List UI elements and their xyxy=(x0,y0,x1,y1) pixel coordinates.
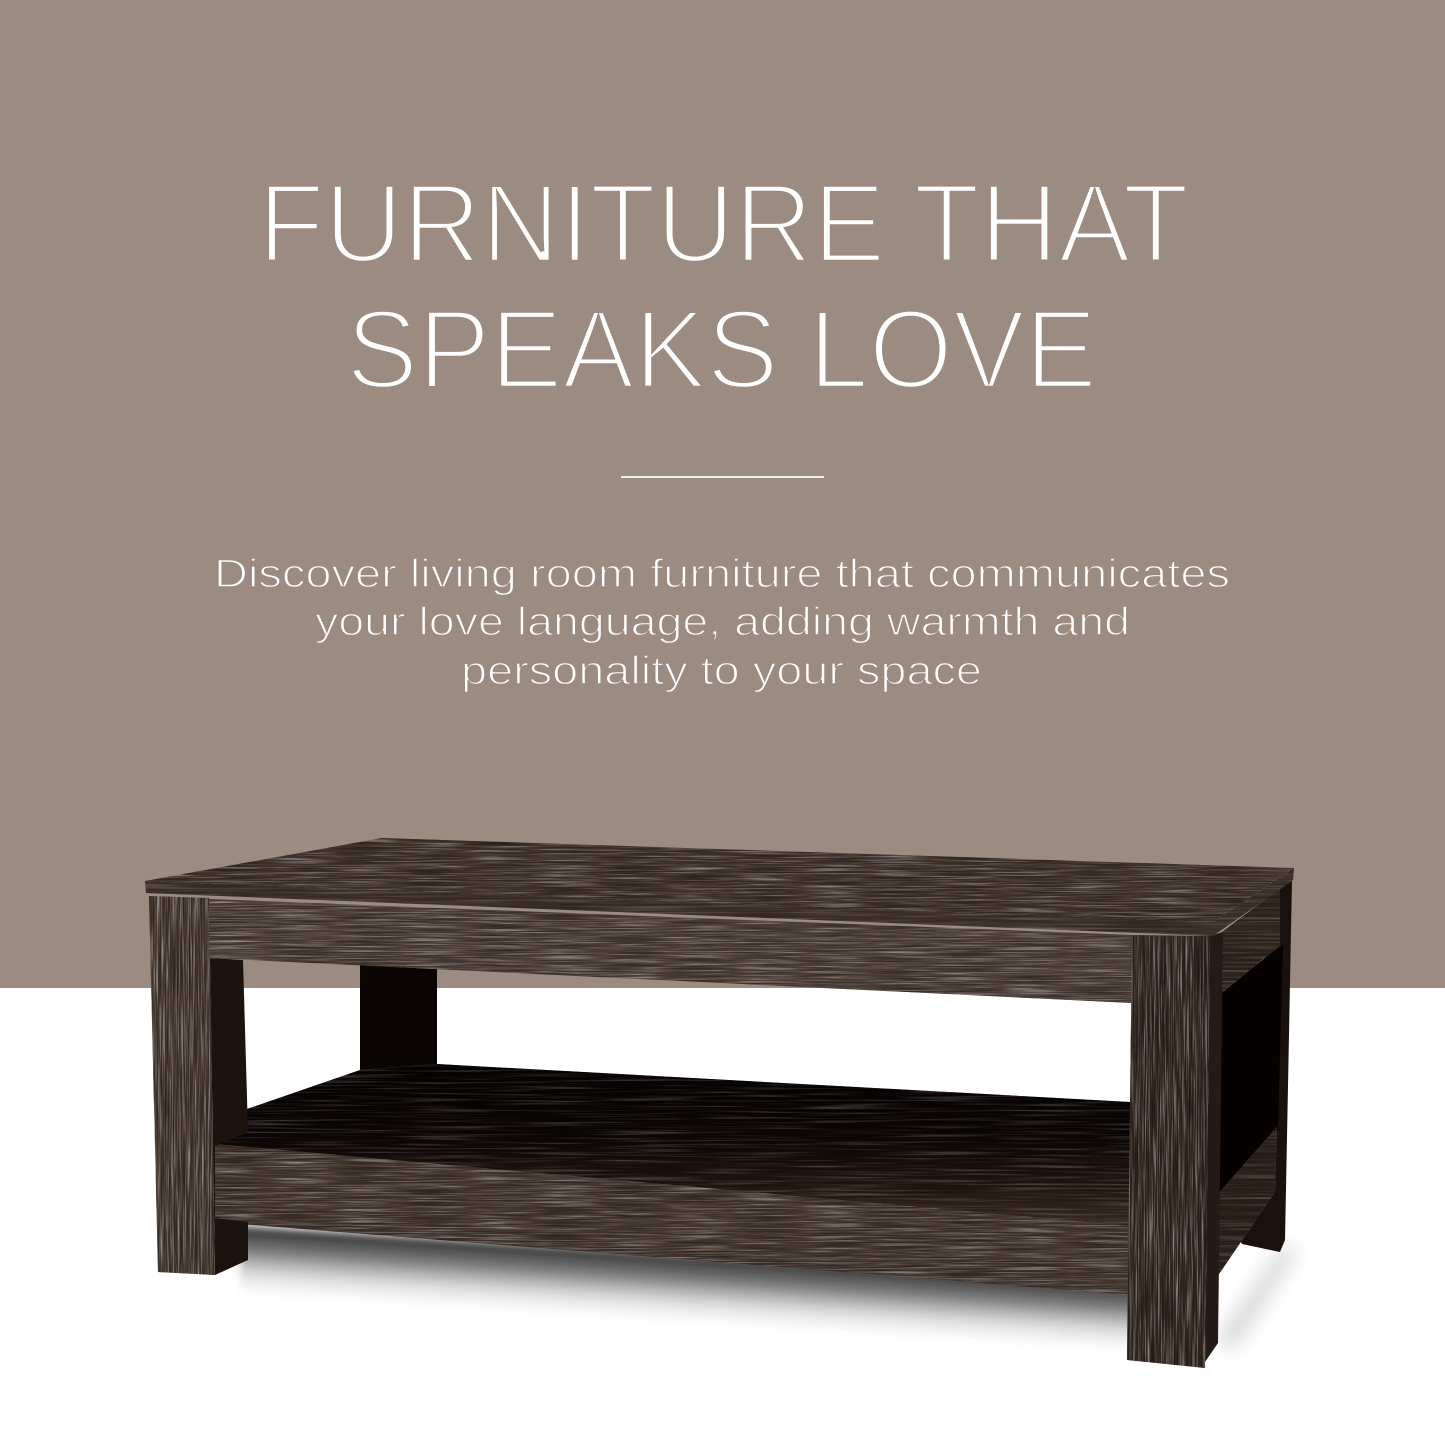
lower side rail xyxy=(1217,1127,1277,1277)
shelf top xyxy=(215,1064,1130,1228)
left front leg xyxy=(149,896,215,1275)
title: FURNITURE THAT xyxy=(258,161,1189,286)
subtitle text block: personality to your space xyxy=(461,649,982,693)
right leg side face xyxy=(1205,932,1223,1362)
divider rule xyxy=(621,476,824,478)
subtitle text block: Discover living room furniture that communicates xyxy=(214,552,1230,596)
title xyxy=(258,161,1189,412)
table top surface xyxy=(145,838,1294,922)
side opening xyxy=(1218,945,1283,1195)
background: taupe panel xyxy=(0,0,1445,988)
side apron xyxy=(1222,888,1280,993)
subtitle text block xyxy=(214,552,1230,693)
back left leg xyxy=(360,964,437,1075)
title: SPEAKS LOVE xyxy=(346,287,1097,412)
floor shadow xyxy=(240,1226,1296,1353)
back right leg xyxy=(1218,880,1292,1252)
coffee table illustration xyxy=(145,838,1296,1368)
front apron xyxy=(209,899,1132,1003)
subtitle text block: your love language, adding warmth and xyxy=(315,600,1130,644)
left leg inner side xyxy=(209,958,248,1275)
shelf front xyxy=(215,1144,1130,1295)
right front leg xyxy=(1127,935,1210,1368)
table top edge xyxy=(145,868,1294,936)
